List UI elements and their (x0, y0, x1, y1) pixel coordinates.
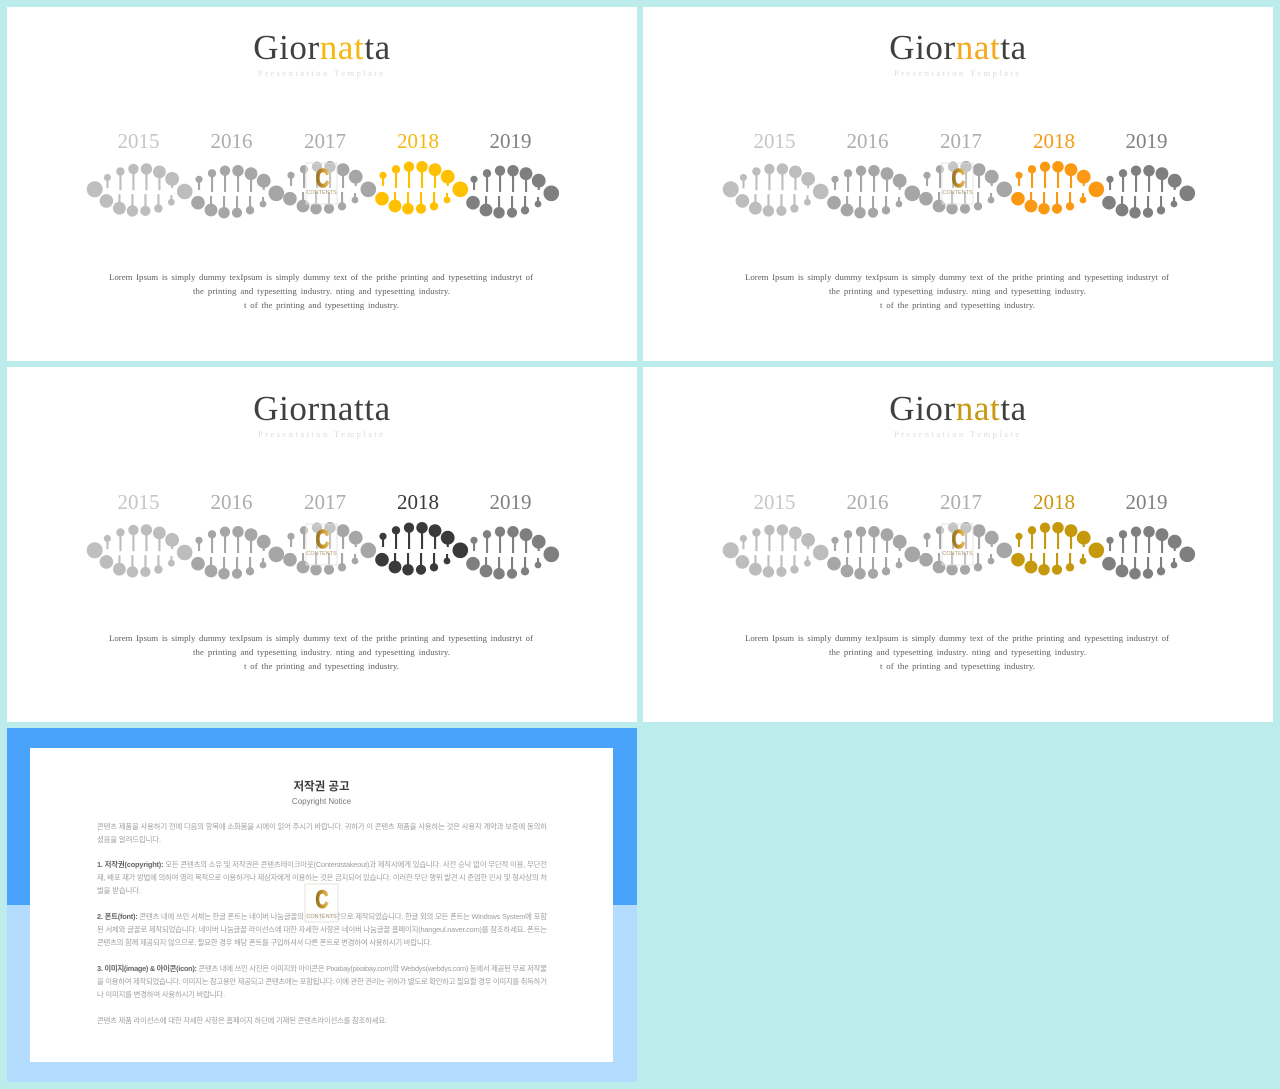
notice background (7, 728, 637, 1082)
description text: the printing and typesetting industry. nting and typesetting industry. (193, 286, 450, 296)
year labels (118, 129, 532, 153)
year labels: 2018 (397, 129, 439, 153)
year labels: 2015 (754, 490, 796, 514)
description text: t of the printing and typesetting industry. (880, 661, 1035, 671)
DNA helix timeline (723, 161, 1195, 218)
watermark logo: C (316, 524, 329, 554)
year labels: 2017 (304, 490, 346, 514)
year labels: 2016 (846, 490, 888, 514)
DNA helix timeline (87, 522, 559, 579)
year labels: 2017 (304, 129, 346, 153)
watermark logo: CONTENTS (942, 190, 973, 196)
year labels: 2019 (1126, 129, 1168, 153)
notice body text: 3. 이미지(image) & 아이콘(icon): 콘텐츠 내에 쓰인 사진은 이미지와 아이콘은 Pixabay(pixabay.com)와 Webdys(webdys.com) 등에서 제공된 무료 저작물 (97, 964, 547, 973)
watermark logo: CONTENTS (306, 914, 337, 920)
notice subheading: Copyright Notice (292, 797, 352, 806)
notice body text: 셨음을 알려드립니다. (97, 835, 161, 844)
panel: slide 4, gold 2018 (643, 367, 1273, 722)
subtitle: Presentation Template (894, 68, 1019, 78)
watermark logo: CONTENTS (306, 551, 337, 557)
year labels: 2018 (1033, 129, 1075, 153)
notice body text: 된 서체와 글꼴로 제작되었습니다. 네이버 나눔글꼴 라이선스에 대한 자세한 사항은 네이버 나눔글꼴 홈페이지(hangeul.naver.com)를 참조하세요. 폰트는 (97, 925, 547, 934)
watermark logo: C (952, 163, 965, 193)
year labels: 2017 (940, 129, 982, 153)
description text: the printing and typesetting industry. nting and typesetting industry. (193, 647, 450, 657)
description text: the printing and typesetting industry. nting and typesetting industry. (829, 647, 1086, 657)
description text: t of the printing and typesetting industry. (880, 300, 1035, 310)
year labels: 2015 (118, 490, 160, 514)
description text: Lorem Ipsum is simply dummy texIpsum is simply dummy text of the prithe printing and typesetting industryt of (109, 633, 533, 643)
year labels (118, 490, 532, 514)
description text: Lorem Ipsum is simply dummy texIpsum is simply dummy text of the prithe printing and typesetting industryt of (109, 272, 533, 282)
year labels: 2018 (397, 490, 439, 514)
description text: Lorem Ipsum is simply dummy texIpsum is simply dummy text of the prithe printing and typesetting industryt of (745, 633, 1169, 643)
description text (745, 272, 1169, 310)
description text: the printing and typesetting industry. nting and typesetting industry. (829, 286, 1086, 296)
watermark logo: CONTENTS (942, 551, 973, 557)
subtitle: Presentation Template (258, 68, 383, 78)
subtitle: Presentation Template (894, 429, 1019, 439)
DNA helix timeline (87, 161, 559, 218)
year labels: 2017 (940, 490, 982, 514)
year labels (754, 129, 1168, 153)
panel: slide 1, yellow 2018 (7, 7, 637, 361)
notice body text: 1. 저작권(copyright): 모든 콘텐츠의 소유 및 저작권은 콘텐츠테이크아웃(Contentstakeout)과 제작사에게 있습니다. 사전 승낙 없이 무단적 이용, 무단전 (97, 860, 547, 869)
watermark logo (306, 524, 337, 565)
year labels: 2019 (1126, 490, 1168, 514)
notice heading: 저작권 공고 (293, 779, 350, 793)
description text (109, 633, 533, 671)
watermark logo: C (952, 524, 965, 554)
title: Giornatta (889, 28, 1027, 67)
watermark logo: CONTENTS (306, 190, 337, 196)
year labels: 2016 (210, 129, 252, 153)
panel: slide 3, black 2018 (7, 367, 637, 722)
description text: t of the printing and typesetting industry. (244, 661, 399, 671)
notice body text: 콘텐츠 제품 라이선스에 대한 자세한 사항은 홈페이지 하단에 기재된 콘텐츠라이선스를 참조하세요. (97, 1016, 387, 1025)
year labels: 2016 (846, 129, 888, 153)
watermark logo: C (316, 885, 329, 914)
notice body text: 벌을 받습니다. (97, 886, 141, 895)
description text: Lorem Ipsum is simply dummy texIpsum is simply dummy text of the prithe printing and typesetting industryt of (745, 272, 1169, 282)
notice body text: 재, 배포 재가 방법에 의하여 영리 목적으로 이용하거나 제삼자에게 이용하는 것은 금지되어 있습니다. 이러한 무단 행위 발견 시 준엄한 민사 및 형사상의 처 (97, 873, 547, 882)
notice body text: 2. 폰트(font): 콘텐츠 내에 쓰인 서체는 한글 폰트는 네이버 나눔글꼴의 서체를 바탕으로 제작되었습니다. 한글 외의 모든 폰트는 Windows System에 포함 (97, 912, 547, 921)
notice body text: 을 이용하여 제작되었습니다. 이미지는 참고용만 제공되고 콘텐츠에는 포함됩니다. 이에 관한 권리는 귀하가 별도로 확인하고 필요할 경우 이미지를 취득하거 (97, 977, 547, 986)
panel: slide 2, orange 2018 (643, 7, 1273, 361)
year labels: 2019 (490, 129, 532, 153)
description text (745, 633, 1169, 671)
year labels: 2016 (210, 490, 252, 514)
notice card (30, 748, 613, 1062)
year labels: 2019 (490, 490, 532, 514)
watermark logo (306, 163, 337, 204)
year labels: 2015 (754, 129, 796, 153)
description text: t of the printing and typesetting industry. (244, 300, 399, 310)
subtitle: Presentation Template (258, 429, 383, 439)
watermark logo (305, 884, 338, 922)
year labels: 2015 (118, 129, 160, 153)
DNA helix timeline (723, 522, 1195, 579)
watermark logo (942, 524, 973, 565)
description text (109, 272, 533, 310)
notice body text: 콘텐츠의 함께 제공되지 않으므로, 필요한 경우 해당 폰트를 구입하셔서 다른 폰트로 변경하여 사용하시기 바랍니다. (97, 938, 432, 947)
title: Giornatta (253, 389, 391, 428)
notice body text: 나 이미지를 변경하여 사용하시기 바랍니다. (97, 990, 225, 999)
title: Giornatta (889, 389, 1027, 428)
title: Giornatta (253, 28, 391, 67)
year labels (754, 490, 1168, 514)
notice body text (97, 822, 547, 1025)
watermark logo: C (316, 163, 329, 193)
notice body text: 콘텐츠 제품을 사용하기 전에 다음의 항목에 소화봄을 시에이 읽어 주시기 바랍니다. 귀하가 이 콘텐츠 제품을 사용하는 것은 사용자 계약과 보증에 동의하 (97, 822, 547, 831)
watermark logo (942, 163, 973, 204)
year labels: 2018 (1033, 490, 1075, 514)
